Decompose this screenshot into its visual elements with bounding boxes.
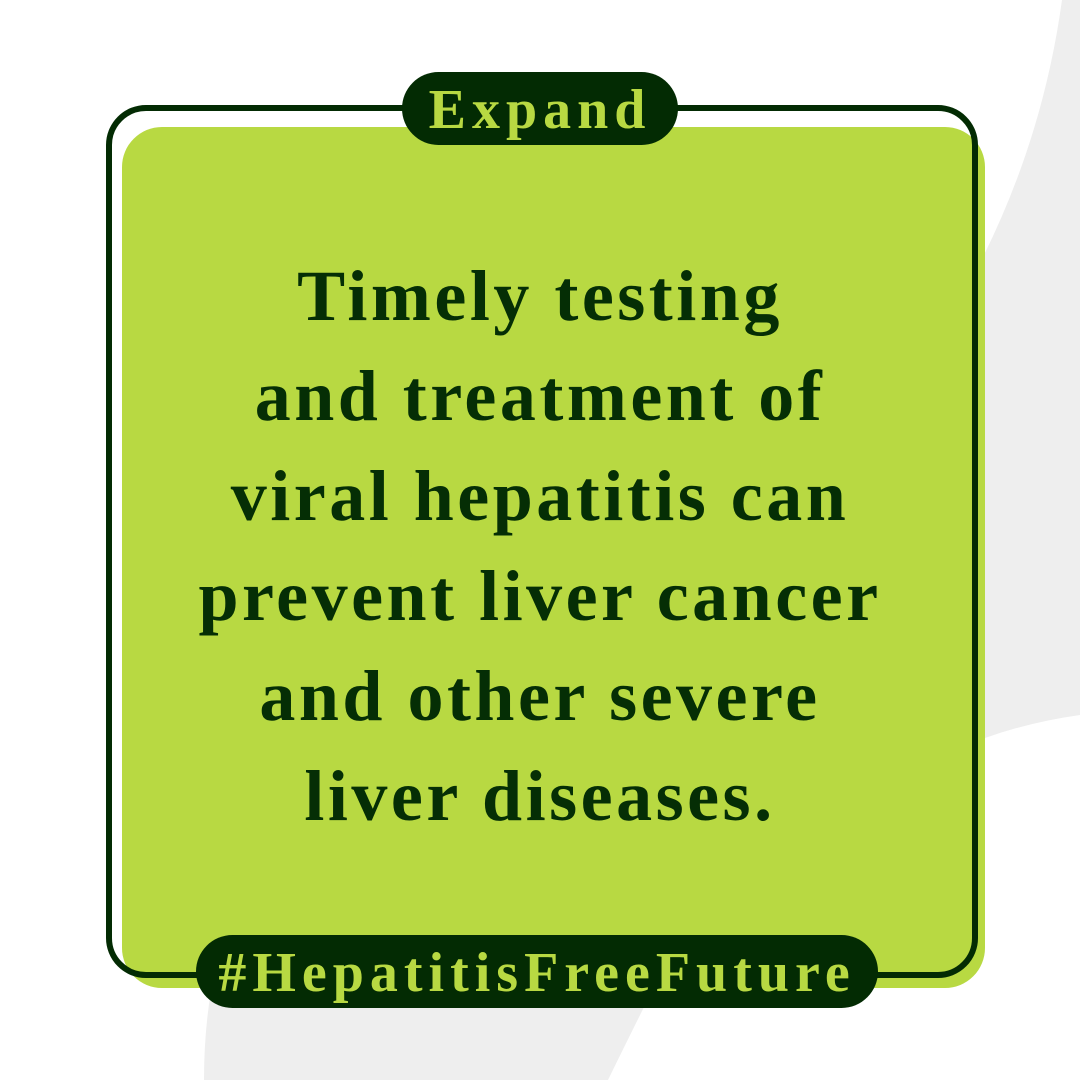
main message: viral hepatitis can	[231, 456, 849, 536]
green panel	[122, 127, 985, 988]
hashtag pill: #HepatitisFreeFuture	[218, 942, 856, 1004]
main message: Timely testing	[297, 256, 783, 336]
heading pill: Expand: Expand	[429, 79, 651, 141]
main message: and treatment of	[255, 356, 825, 436]
main message	[198, 256, 882, 836]
main message: and other severe	[259, 656, 821, 736]
main message: prevent liver cancer	[198, 556, 882, 636]
main message: liver diseases.	[304, 756, 776, 836]
heading pill: Expand	[402, 72, 678, 145]
panel outline	[106, 105, 978, 978]
